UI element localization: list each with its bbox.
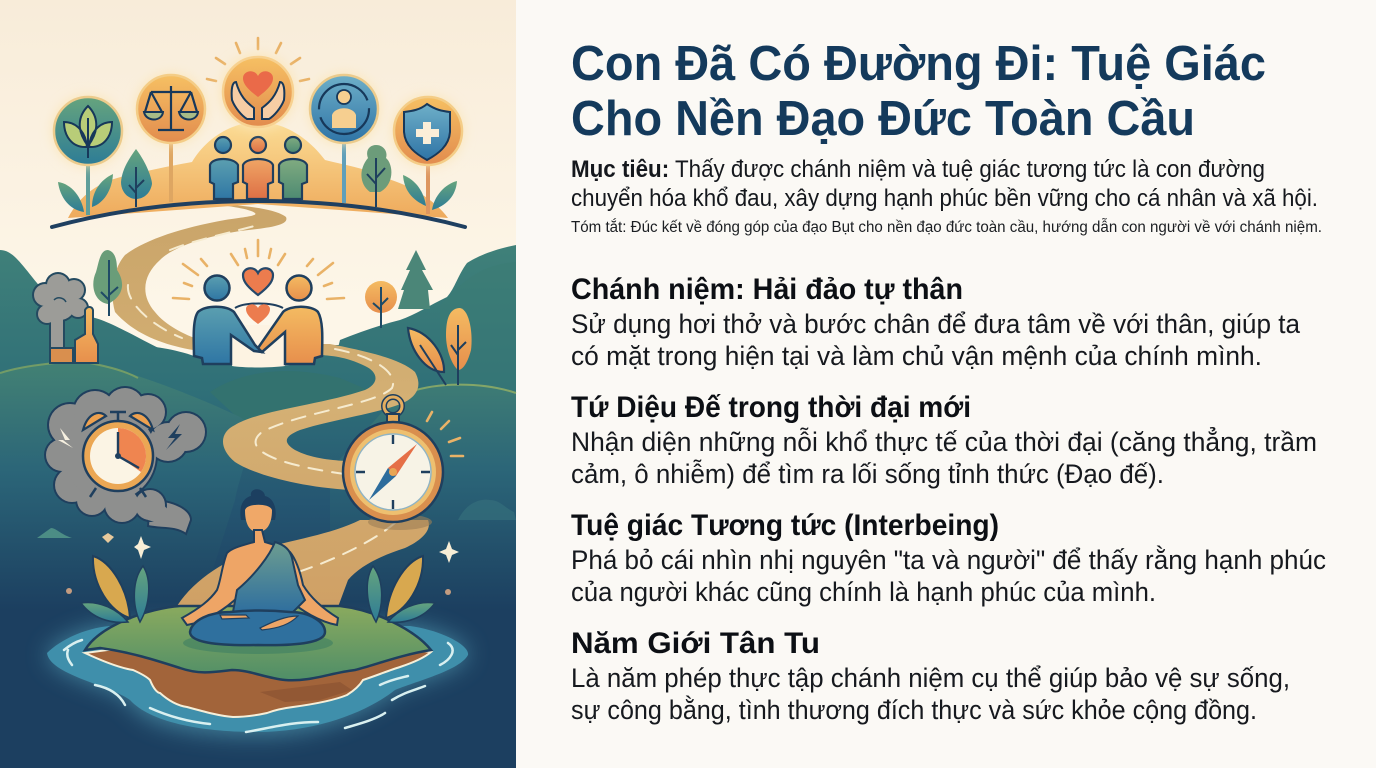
ground arc xyxy=(52,201,465,227)
title: Cho Nền Đạo Đức Toàn Cầu xyxy=(571,92,1195,146)
icon: factory with smoke xyxy=(32,272,98,363)
goal text xyxy=(571,156,1318,212)
section: Chánh niệm: Chánh niệm: Hải đảo tự thân xyxy=(571,273,963,306)
summary text: Tóm tắt: Đúc kết về đóng góp của đạo Bụt cho nền đạo đức toàn cầu, hướng dẫn con người về với chánh niệm. xyxy=(571,219,1322,236)
section: Năm Giới Tân Tu: Là năm phép thực tập chánh niệm cụ thể giúp bảo vệ sự sống, xyxy=(571,663,1290,693)
trees and leaves xyxy=(58,145,457,212)
landscape hills xyxy=(0,245,516,768)
person left xyxy=(194,276,262,364)
icon: compass xyxy=(343,397,463,530)
person right xyxy=(258,276,322,364)
trees on the right xyxy=(365,250,472,385)
gap between figures xyxy=(232,325,285,368)
section: Tuệ giác Tương tức xyxy=(571,509,1326,607)
sun rays xyxy=(207,38,309,81)
hill mound xyxy=(68,122,448,218)
section: Tứ Diệu Đế: cảm, ô nhiễm) để tìm ra lối sống tỉnh thức (Đạo đế). xyxy=(571,459,1164,489)
section: Tuệ giác Tương tức: của người khác cũng chính là hạnh phúc của mình. xyxy=(571,577,1156,607)
panel: illustration xyxy=(0,0,516,768)
goal text: Mục tiêu: Thấy được chánh niệm và tuệ giác tương tức là con đường xyxy=(571,156,1265,183)
three people xyxy=(210,137,307,199)
section: Chánh niệm: Sử dụng hơi thở và bước chân để đưa tâm về với thân, giúp ta xyxy=(571,309,1300,339)
section: Tứ Diệu Đế: Nhận diện những nỗi khổ thực tế của thời đại (căng thẳng, trầm xyxy=(571,427,1317,457)
earth xyxy=(85,630,431,717)
rays xyxy=(173,240,344,299)
island plants xyxy=(81,556,435,622)
robe xyxy=(233,542,305,612)
section: Năm Giới Tân Tu: Năm Giới Tân Tu xyxy=(571,627,820,660)
section: Tứ Diệu Đế xyxy=(571,391,1317,489)
icon: justice scale circle xyxy=(136,74,206,144)
section: Năm Giới Tân Tu xyxy=(571,627,1290,725)
icon: person in cycle circle xyxy=(309,74,379,144)
icon: storm cloud xyxy=(44,386,207,534)
title: Con Đã Có Đường Đi: Tuệ Giác xyxy=(571,37,1266,91)
section: Năm Giới Tân Tu: sự công bằng, tình thương đích thực và sức khỏe cộng đồng. xyxy=(571,695,1257,725)
grass xyxy=(85,606,431,680)
body and arms xyxy=(182,530,338,625)
legs xyxy=(190,610,325,645)
face xyxy=(245,505,272,532)
section: Chánh niệm xyxy=(571,273,1300,371)
hearts xyxy=(243,268,273,295)
title xyxy=(571,37,1266,146)
top arc: community scene xyxy=(52,38,465,227)
section: Chánh niệm: có mặt trong hiện tại và làm chủ vận mệnh của chính mình. xyxy=(571,341,1262,371)
goal text: chuyển hóa khổ đau, xây dựng hạnh phúc bền vững cho cá nhân và xã hội. xyxy=(571,185,1318,212)
icon: heart in hands circle xyxy=(221,55,295,129)
water around island xyxy=(47,626,468,735)
icon: alarm clock xyxy=(83,412,153,497)
stems xyxy=(86,165,90,215)
trees on the road bend xyxy=(93,250,122,316)
meditating figure xyxy=(182,489,338,654)
floating island xyxy=(85,606,431,717)
section: Tứ Diệu Đế: Tứ Diệu Đế trong thời đại mới xyxy=(571,391,971,424)
section: Tuệ giác Tương tức: Phá bỏ cái nhìn nhị nguyên "ta và người" để thấy rằng hạnh phúc xyxy=(571,545,1326,575)
illustration sky xyxy=(0,0,516,768)
sparkles and small clouds xyxy=(37,500,516,595)
hair xyxy=(240,489,276,520)
people holding hands xyxy=(173,240,344,368)
icon: leaf circle xyxy=(53,96,123,166)
winding road xyxy=(112,204,429,615)
section: Tuệ giác Tương tức: Tuệ giác Tương tức (Interbeing) xyxy=(571,509,999,542)
icon: shield with cross circle xyxy=(393,96,463,166)
